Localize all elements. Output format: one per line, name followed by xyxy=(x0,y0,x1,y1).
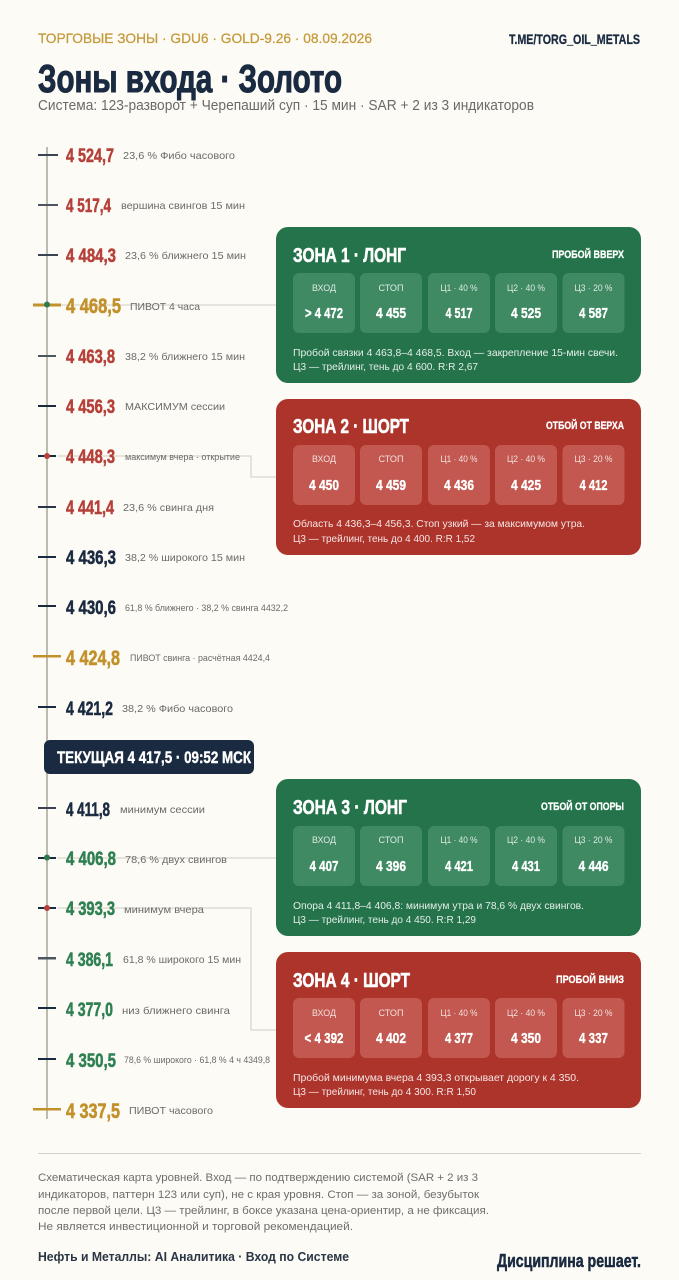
level 4524,7 xyxy=(38,146,235,167)
zone 4 metric tiles: 4 337 xyxy=(579,1030,608,1047)
panel: zone 4 short xyxy=(276,952,641,1108)
level 4484,3: 4 484,3 xyxy=(66,246,116,267)
zone 3 metric tiles: 4 446 xyxy=(578,858,608,875)
zone 4 note: Пробой минимума вчера 4 393,3 открывает дорогу к 4 350. xyxy=(293,1072,579,1084)
level 4484,3 xyxy=(38,246,246,267)
zone 1 metric tiles: 4 517 xyxy=(446,305,472,322)
zone 4 metric tiles: Ц1 · 40 % xyxy=(440,1008,478,1018)
zone 4 tag: ПРОБОЙ ВНИЗ xyxy=(556,973,624,986)
level 4421,2 xyxy=(38,699,233,720)
zone 1 metric tiles: 4 525 xyxy=(511,305,541,322)
level 4456,3: МАКСИМУМ сессии xyxy=(125,401,225,413)
zone 1 metric tiles: Ц1 · 40 % xyxy=(440,283,478,293)
zone 4 note xyxy=(293,1072,579,1098)
zone 1 note: Пробой связки 4 463,8–4 468,5. Вход — закрепление 15-мин свечи. xyxy=(293,347,618,359)
level 4421,2: 4 421,2 xyxy=(66,699,113,720)
zone 2 metric tiles: 4 436 xyxy=(444,477,474,494)
level 4517,4: 4 517,4 xyxy=(66,196,111,217)
level 4484,3: 23,6 % ближнего 15 мин xyxy=(125,250,246,262)
zone 2 tag: ОТБОЙ ОТ ВЕРХА xyxy=(546,419,624,432)
zone 4 metric tiles: 4 402 xyxy=(376,1030,406,1047)
zone 4 metric tiles: Ц2 · 40 % xyxy=(507,1008,545,1018)
zone 3 metric tiles: СТОП xyxy=(378,835,404,845)
level 4337,5 pivot: ПИВОТ часового xyxy=(129,1105,213,1117)
zone 1 metric tiles: ВХОД xyxy=(312,283,336,293)
zone 2 metric tiles xyxy=(293,445,624,505)
zone 2 metric tiles: 4 425 xyxy=(511,477,541,494)
zone 4 metric tiles: 4 350 xyxy=(511,1030,541,1047)
zone 4 metric tiles: ВХОД xyxy=(312,1008,336,1018)
zone 2 metric tiles: СТОП xyxy=(378,454,404,464)
level 4386,1 xyxy=(38,950,241,971)
panel: zone 2 short xyxy=(276,399,641,555)
level 4430,6: 4 430,6 xyxy=(66,598,116,619)
current price pill: ТЕКУЩАЯ 4 417,5 · 09:52 МСК xyxy=(57,748,251,767)
zone 3 note xyxy=(293,900,584,926)
zone 4 metric tiles: Ц3 · 20 % xyxy=(574,1008,612,1018)
level 4456,3: 4 456,3 xyxy=(66,397,115,418)
footer brand: Нефть и Металлы: AI Аналитика · Вход по Системе xyxy=(38,1250,349,1264)
panel: zone 3 long xyxy=(276,779,641,936)
zone 2 metric tiles: Ц3 · 20 % xyxy=(574,454,612,464)
zone 2 metric tiles: 4 412 xyxy=(580,477,608,494)
level 4463,8 xyxy=(38,347,245,368)
zone 3 note: Опора 4 411,8–4 406,8: минимум утра и 78,6 % двух свингов. xyxy=(293,900,584,912)
zone 2 metric tiles: ВХОД xyxy=(312,454,336,464)
header tagline: ТОРГОВЫЕ ЗОНЫ · GDU6 · GOLD-9.26 · 08.09.2026 xyxy=(38,30,372,46)
level 4406,8: 4 406,8 xyxy=(66,849,116,870)
zone 2 metric tiles: Ц2 · 40 % xyxy=(507,454,545,464)
level 4517,4: вершина свингов 15 мин xyxy=(121,200,245,212)
zone 2 metric tiles: 4 459 xyxy=(376,477,406,494)
level 4411,8: 4 411,8 xyxy=(66,800,110,821)
level 4377,0: низ ближнего свинга xyxy=(122,1005,230,1017)
level 4386,1: 4 386,1 xyxy=(66,950,113,971)
level 4350,5: 4 350,5 xyxy=(66,1051,116,1072)
level 4424,8 pivot xyxy=(33,647,270,670)
level 4456,3 xyxy=(38,397,225,418)
zone 1 heading: ЗОНА 1 · ЛОНГ xyxy=(293,245,406,267)
level 4448,3 xyxy=(38,447,240,468)
zone 1 metric tiles: Ц3 · 20 % xyxy=(574,283,612,293)
zone 1 metric tiles xyxy=(293,273,624,333)
level 4424,8 pivot: ПИВОТ свинга · расчётная 4424,4 xyxy=(130,653,270,664)
level 4421,2: 38,2 % Фибо часового xyxy=(122,703,233,715)
level 4441,4: 23,6 % свинга дня xyxy=(123,502,214,514)
subtitle: Система: 123-разворот + Черепаший суп · 15 мин · SAR + 2 из 3 индикаторов xyxy=(38,98,534,114)
level 4448,3: максимум вчера · открытие xyxy=(125,452,240,462)
disclaimer: после первой цели. Ц3 — трейлинг, в боксе указана цена-ориентир, а не фиксация. xyxy=(38,1205,489,1217)
level 4468,5 pivot: ПИВОТ 4 часа xyxy=(130,301,200,313)
zone 1 tag: ПРОБОЙ ВВЕРХ xyxy=(552,248,625,261)
zone 3 metric tiles: Ц1 · 40 % xyxy=(440,835,478,845)
zone 2 metric tiles: 4 450 xyxy=(309,477,339,494)
level 4337,5 pivot xyxy=(33,1100,213,1123)
zone 1 metric tiles: > 4 472 xyxy=(305,305,343,322)
zone 2 metric tiles: Ц1 · 40 % xyxy=(440,454,478,464)
zone 1 metric tiles: 4 587 xyxy=(579,305,608,322)
level 4424,8 pivot: 4 424,8 xyxy=(66,647,120,670)
level 4524,7: 4 524,7 xyxy=(66,146,114,167)
disclaimer: индикаторов, паттерн 123 или суп), не с края уровня. Стоп — за зоной, безубыток xyxy=(38,1189,479,1201)
zone 3 note: Ц3 — трейлинг, тень до 4 450. R:R 1,29 xyxy=(293,914,476,926)
level 4463,8: 38,2 % ближнего 15 мин xyxy=(125,351,245,363)
level 4350,5 xyxy=(38,1051,270,1072)
zone 1 note: Ц3 — трейлинг, тень до 4 600. R:R 2,67 xyxy=(293,361,478,373)
zone 4 metric tiles: 4 377 xyxy=(445,1030,473,1047)
zone 3 metric tiles: Ц2 · 40 % xyxy=(507,835,545,845)
level 4430,6: 61,8 % ближнего · 38,2 % свинга 4432,2 xyxy=(125,603,288,614)
zone 3 metric tiles: ВХОД xyxy=(312,835,336,845)
zone 1 metric tiles: Ц2 · 40 % xyxy=(507,283,545,293)
footer slogan: Дисциплина решает. xyxy=(497,1251,641,1271)
level 4393,3: 4 393,3 xyxy=(66,899,115,920)
level 4436,3: 38,2 % широкого 15 мин xyxy=(125,552,245,564)
title: Зоны входа · Золото xyxy=(38,58,342,101)
level 4441,4 xyxy=(38,498,214,519)
level 4386,1: 61,8 % широкого 15 мин xyxy=(123,954,241,966)
level 4393,3 xyxy=(38,899,204,920)
disclaimer: Схематическая карта уровней. Вход — по подтверждению системой (SAR + 2 из 3 xyxy=(38,1172,478,1184)
level 4468,5 pivot: 4 468,5 xyxy=(66,295,121,318)
zone 3 metric tiles: 4 431 xyxy=(512,858,540,875)
level 4377,0 xyxy=(38,1000,230,1021)
zone 4 metric tiles: СТОП xyxy=(378,1008,404,1018)
level 4468,5 pivot xyxy=(33,295,200,318)
level 4430,6 xyxy=(38,598,288,619)
level 4377,0: 4 377,0 xyxy=(66,1000,113,1021)
zone 4 metric tiles xyxy=(293,998,624,1058)
level 4517,4 xyxy=(38,196,245,217)
level 4393,3: минимум вчера xyxy=(124,904,204,916)
level 4411,8: минимум сессии xyxy=(120,804,205,816)
level 4436,3 xyxy=(38,548,245,569)
channel link: T.ME/TORG_OIL_METALS xyxy=(509,31,640,47)
zone 2 note xyxy=(293,518,585,545)
zone 2 note: Ц3 — трейлинг, тень до 4 400. R:R 1,52 xyxy=(293,533,475,545)
zone 4 heading: ЗОНА 4 · ШОРТ xyxy=(293,970,410,992)
zone 3 heading: ЗОНА 3 · ЛОНГ xyxy=(293,797,407,819)
zone 3 tag: ОТБОЙ ОТ ОПОРЫ xyxy=(541,800,624,813)
zone 1 note xyxy=(293,347,618,373)
level 4448,3: 4 448,3 xyxy=(66,447,115,468)
zone 3 metric tiles xyxy=(293,826,624,886)
zone 2 note: Область 4 436,3–4 456,3. Стоп узкий — за максимумом утра. xyxy=(293,518,585,530)
level 4436,3: 4 436,3 xyxy=(66,548,116,569)
level 4524,7: 23,6 % Фибо часового xyxy=(123,150,235,162)
level 4337,5 pivot: 4 337,5 xyxy=(66,1100,120,1123)
zone 3 metric tiles: 4 396 xyxy=(376,858,406,875)
level 4406,8: 78,6 % двух свингов xyxy=(125,854,227,866)
panel: zone 1 long xyxy=(276,227,641,383)
price axis xyxy=(46,147,48,1119)
disclaimer xyxy=(38,1172,489,1233)
level 4441,4: 4 441,4 xyxy=(66,498,114,519)
level 4350,5: 78,6 % широкого · 61,8 % 4 ч 4349,8 xyxy=(124,1055,270,1066)
disclaimer: Не является инвестиционной и торговой рекомендацией. xyxy=(38,1221,353,1233)
zone 3 metric tiles: 4 421 xyxy=(445,858,473,875)
zone 4 note: Ц3 — трейлинг, тень до 4 300. R:R 1,50 xyxy=(293,1086,476,1098)
current price pill xyxy=(44,740,254,774)
zone 1 metric tiles: 4 455 xyxy=(376,305,406,322)
level 4411,8 xyxy=(38,800,205,821)
zone 4 metric tiles: < 4 392 xyxy=(304,1030,344,1047)
zone 3 metric tiles: 4 407 xyxy=(310,858,338,875)
level 4406,8 xyxy=(38,849,227,870)
zone 3 metric tiles: Ц3 · 20 % xyxy=(574,835,612,845)
level 4463,8: 4 463,8 xyxy=(66,347,115,368)
zone 1 metric tiles: СТОП xyxy=(378,283,404,293)
zone 2 heading: ЗОНА 2 · ШОРТ xyxy=(293,416,409,438)
